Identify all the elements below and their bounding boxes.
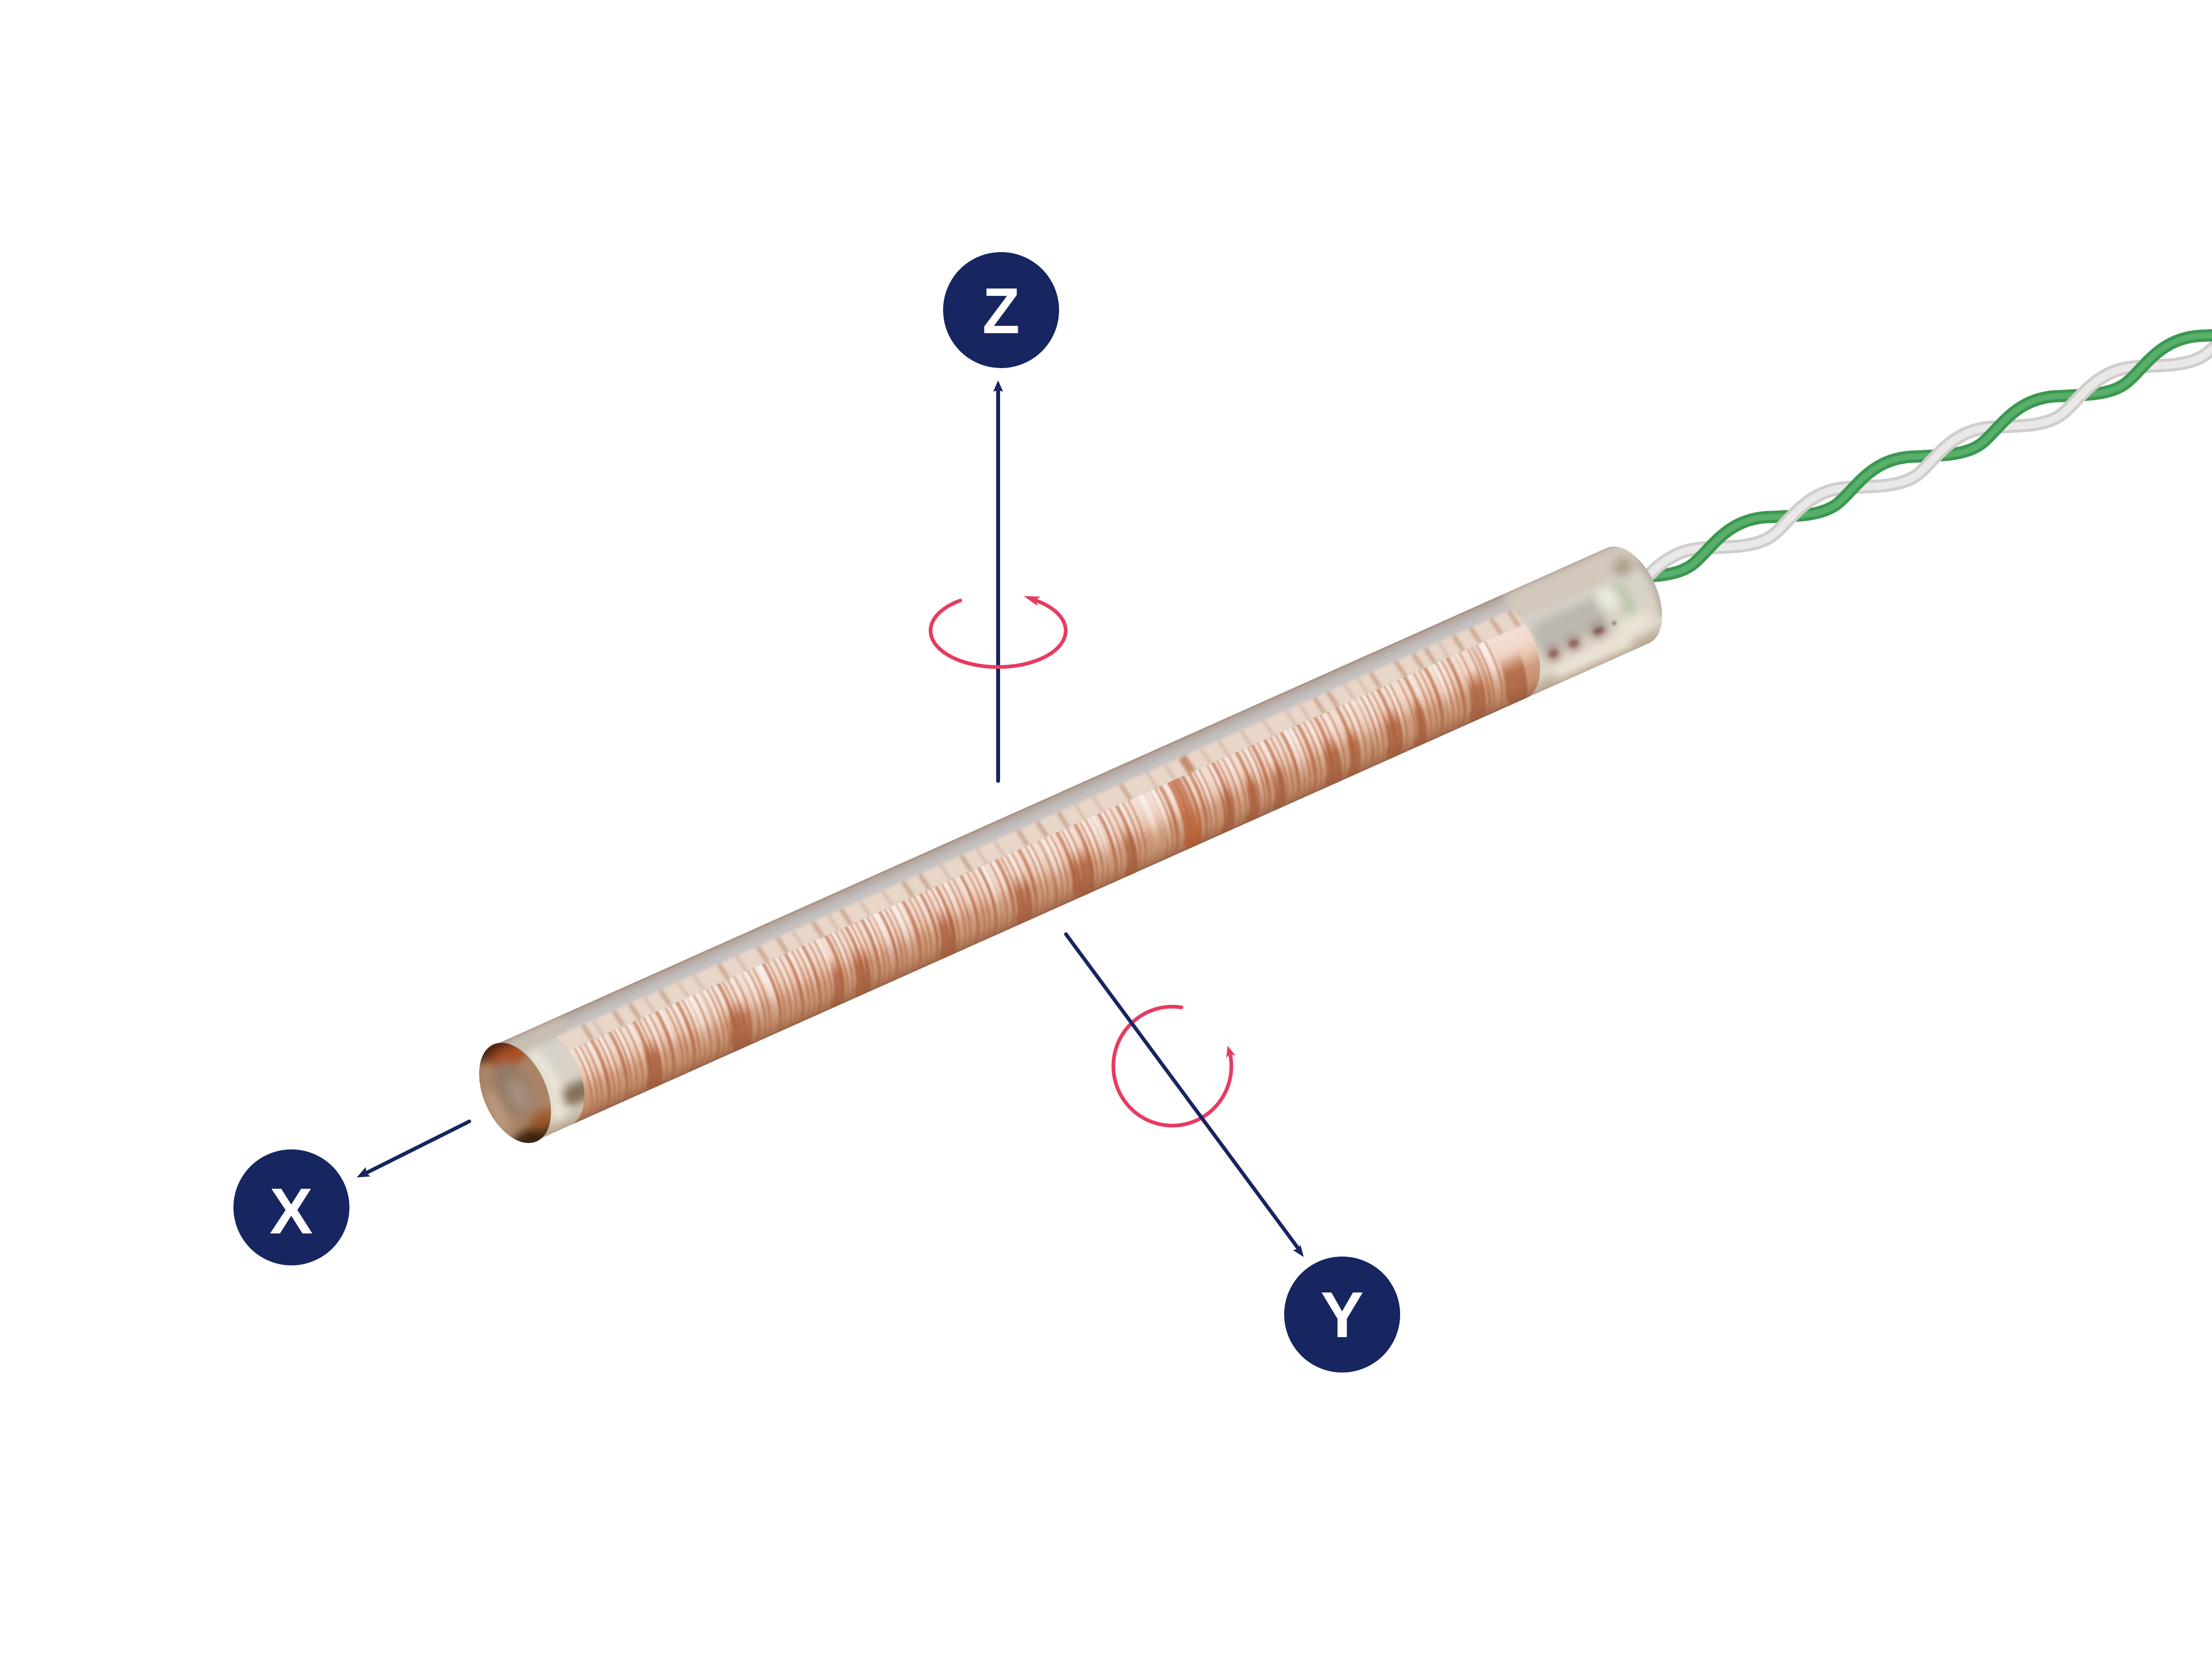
y label badge: Y bbox=[1321, 1279, 1364, 1351]
z label badge: Z bbox=[982, 275, 1020, 347]
light windings bbox=[686, 641, 1501, 1047]
x label badge: X bbox=[269, 1175, 313, 1247]
far end glass details bbox=[1502, 546, 1662, 682]
thin dark windings bbox=[573, 641, 1503, 1118]
copper winding band above highlight bbox=[528, 599, 1573, 1128]
x axis arrow bbox=[357, 1121, 469, 1177]
y axis rotation arrow bbox=[1113, 1007, 1235, 1126]
diagram: coil sensor with X, Y, Z axes bbox=[233, 252, 2212, 1373]
y label badge bbox=[1284, 1257, 1400, 1373]
wide dark windings bbox=[642, 652, 1528, 1090]
end cap bbox=[479, 1043, 551, 1143]
winding stripes bbox=[573, 641, 1528, 1118]
z axis arrow bbox=[993, 380, 1003, 781]
z axis rotation arrow bbox=[930, 596, 1065, 667]
coil sensor cylinder bbox=[460, 524, 1684, 1160]
y axis arrow bbox=[1066, 934, 1304, 1257]
z label badge bbox=[943, 252, 1059, 368]
glass body bbox=[494, 536, 1676, 1141]
x label badge bbox=[233, 1149, 349, 1265]
twisted green and white wire pair bbox=[1564, 275, 2212, 608]
near end glass details bbox=[509, 1016, 585, 1122]
highlight line along cylinder bbox=[540, 572, 1641, 1063]
